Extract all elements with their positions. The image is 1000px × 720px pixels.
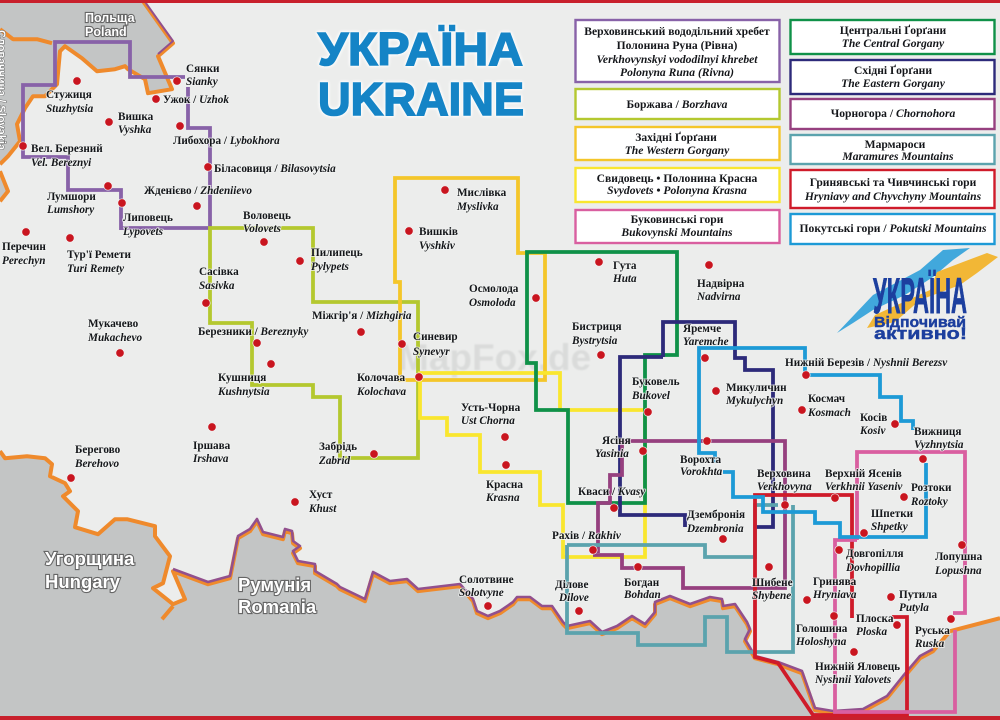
legend: right column: Центральні Ґорґани (840, 23, 947, 37)
settlement labels: Mykulychyn (725, 395, 783, 407)
settlement labels: Holoshyna (795, 636, 847, 648)
settlement labels: Krasna (485, 492, 520, 504)
route: Western Gorgany (395, 178, 545, 380)
settlement labels: Mukachevo (87, 332, 142, 344)
settlement labels: Verkhnii Yaseniv (825, 481, 903, 493)
settlement labels: Либохора / Lybokhora (173, 135, 280, 147)
settlement labels: Бистриця (572, 321, 622, 333)
settlement labels: Vorokhta (680, 466, 723, 478)
route: Borzhava (210, 228, 418, 458)
settlement labels: Вижниця (914, 426, 961, 438)
legend: right column (790, 20, 994, 244)
settlement labels: Тур'ї Ремети (67, 249, 131, 261)
settlement labels: Ворохта (680, 454, 722, 466)
settlement labels: Kushnytsia (217, 386, 270, 398)
settlement labels: Красна (486, 479, 523, 491)
settlement labels: Hryniava (812, 589, 857, 601)
settlement labels: Гута (613, 260, 637, 272)
settlement labels: Volovets (243, 223, 282, 235)
settlement labels: Verkhovyna (757, 481, 812, 493)
settlement labels: Нижній Березів / Nyshnii Berezsv (785, 357, 948, 369)
country labels: Hungary (45, 571, 121, 592)
settlement labels: Lypovets (122, 226, 164, 238)
settlement labels: Солотвине (459, 574, 514, 586)
settlement labels: Колочава (357, 372, 406, 384)
legend: left column: The Western Gorgany (625, 144, 730, 157)
settlement labels: Вишків (419, 226, 458, 238)
settlement labels: Ust Chorna (461, 415, 515, 427)
settlement labels: Воловець (243, 210, 291, 222)
legend: left column: Буковинські гори (631, 213, 724, 226)
settlement labels: Sianky (186, 76, 218, 88)
title (318, 23, 524, 125)
settlement labels: Yasinia (595, 448, 629, 460)
legend: left column: Верховинський вододільний хребет (584, 25, 770, 38)
settlement labels: Kolochava (356, 386, 407, 398)
legend: left column: Західні Ґорґани (635, 130, 717, 144)
settlement labels: Myslivka (456, 201, 499, 213)
settlement labels: Нижній Яловець (815, 661, 900, 673)
settlement labels: Буковель (632, 376, 680, 388)
legend: right column: Maramures Mountains (841, 150, 954, 163)
settlement labels: Путила (899, 589, 938, 601)
settlement labels: Мислівка (457, 187, 507, 199)
settlement labels: Забрідь (319, 441, 357, 453)
settlement labels: Березники / Bereznyky (198, 326, 308, 338)
settlement labels: Ploska (856, 626, 887, 638)
settlement labels: Верхній Ясенів (825, 468, 902, 480)
settlement labels: Ждeнієво / Zhdeniievo (144, 185, 252, 197)
legend: left column: Polonyna Runa (Rivna) (620, 66, 734, 79)
settlement labels: Ужок / Uzhok (163, 94, 229, 106)
settlement labels: Lumshory (46, 204, 94, 216)
settlement labels: Yaremche (683, 336, 729, 348)
settlement labels: Розтоки (911, 482, 952, 494)
settlement labels: Вишка (118, 111, 154, 123)
legend: left column (576, 20, 780, 243)
settlement labels: Vyzhnytsia (914, 439, 964, 451)
settlement labels: Руська (915, 625, 950, 637)
country labels: Romania (238, 596, 317, 617)
settlement labels: Bohdan (623, 589, 661, 601)
settlement labels: Bukovel (631, 390, 671, 402)
settlement labels: Solotvyne (459, 587, 504, 599)
settlement labels: Липовець (123, 212, 173, 224)
settlement labels: Dovhopillia (845, 562, 900, 574)
settlement labels: Шибене (752, 577, 793, 589)
settlement labels: Shpetky (871, 521, 908, 533)
settlement labels: Synevyr (413, 346, 450, 358)
settlement labels: Berehovo (74, 458, 120, 470)
settlement labels: Осмолода (469, 283, 519, 295)
settlement labels: Vyshkiv (419, 240, 456, 252)
legend: right column: Покутські гори / Pokutski Mountains (800, 222, 987, 235)
legend: right column: The Central Gorgany (842, 37, 945, 50)
settlement labels: Putyla (899, 602, 929, 614)
settlement labels: Дзембронія (687, 509, 745, 521)
watermark: MapFox.de (398, 337, 591, 378)
settlement labels: Верховина (757, 468, 811, 480)
title: UKRAINE (318, 73, 524, 125)
settlement labels: Лопушна (935, 551, 983, 563)
settlement labels: Пилипець (311, 247, 363, 259)
settlement labels: Гринява (813, 576, 857, 588)
settlement labels: Dilove (558, 592, 589, 604)
settlement labels: Kosmach (807, 407, 851, 419)
country labels (0, 11, 317, 617)
settlement labels: Vel. Bereznyi (31, 157, 92, 169)
logo: Україна Відпочивай активно (837, 248, 998, 343)
country labels: Польща (85, 11, 136, 25)
settlement labels: Микуличин (726, 382, 787, 394)
legend: right column: Мармароси (865, 138, 926, 151)
settlement labels: Усть-Чорна (461, 402, 521, 414)
legend: right column: Hryniavy and Chyvchyny Mountains (804, 190, 982, 203)
settlement labels: Nyshnii Yalovets (814, 674, 892, 686)
route: Central Gorgany (527, 252, 677, 503)
logo: Україна Відпочивай активно: активно! (874, 324, 967, 343)
settlement labels: Космач (808, 393, 846, 405)
settlement labels: Ясіня (602, 435, 631, 447)
settlement labels: Turi Remety (67, 263, 124, 275)
settlement labels: Богдан (624, 577, 660, 589)
legend: right column: Східні Ґорґани (854, 63, 932, 77)
settlement labels: Кушниця (218, 372, 266, 384)
legend: left column: Verkhovynskyi vododilnyi khrebet (596, 53, 758, 66)
legend: right column: Чорногора / Chornohora (831, 107, 955, 120)
settlement labels: Білaсовиця / Bilasovytsia (214, 163, 336, 175)
settlement labels: Сянки (186, 63, 220, 75)
settlement labels: Перечин (2, 241, 46, 253)
legend: left column: Svydovets • Polonyna Krasna (607, 184, 747, 197)
settlement labels: Довгопілля (846, 548, 904, 560)
logo: Україна Відпочивай активно: Відпочивай (874, 315, 966, 331)
settlement labels: Кваси / Kvasy (578, 486, 645, 498)
settlement labels: Ruska (914, 638, 945, 650)
route: Maramures Mountains (567, 505, 793, 652)
settlement labels: Zabrid (318, 455, 350, 467)
settlement labels: Stuzhytsia (46, 103, 94, 115)
settlement labels: Huta (612, 273, 637, 285)
settlement labels: Roztoky (910, 496, 948, 508)
settlement labels: Bystrytsia (571, 335, 618, 347)
settlement labels: Шпетки (871, 508, 914, 520)
route: Verkhovyna watershed ridge (purple) (23, 42, 210, 230)
settlement labels: Irshava (192, 453, 229, 465)
settlement labels: Іршава (193, 440, 231, 452)
legend: left column: Полонина Руна (Рівна) (617, 39, 737, 52)
settlement labels: Ділове (555, 579, 588, 591)
settlement labels: Надвірна (697, 278, 745, 290)
legend: left column: Боржава / Borzhava (627, 98, 728, 111)
settlement labels: Сасівка (199, 266, 239, 278)
route: Pokutski Mountains (699, 348, 926, 537)
settlement labels: Голошина (796, 623, 848, 635)
route: Hryniavy and Chyvchyny Mountains (755, 495, 907, 715)
settlement labels: Perechyn (2, 255, 46, 267)
legend: right column: The Eastern Gorgany (841, 77, 946, 90)
country labels: Poland (85, 25, 127, 39)
settlements: dots (19, 77, 966, 656)
settlement labels: Синевир (413, 331, 458, 343)
title: УКРАЇНА (318, 23, 523, 75)
country labels: Румунія (238, 574, 311, 595)
settlement labels: Dzembronia (686, 523, 744, 535)
settlement labels: Osmoloda (469, 297, 516, 309)
settlement labels: Shybene (752, 590, 791, 602)
settlement labels: Вел. Березний (31, 143, 103, 155)
settlement labels: Хуст (309, 489, 333, 501)
settlement labels: Лумшори (47, 191, 96, 203)
settlement labels: Vyshka (118, 124, 152, 136)
settlement labels: Берегово (75, 444, 121, 456)
settlement labels: Khust (308, 503, 337, 515)
legend: right column: Гринявські та Чивчинські гори (810, 176, 977, 189)
settlement labels: Плоска (856, 613, 894, 625)
settlement labels: Pylypets (311, 261, 350, 273)
route: Chornohora (593, 441, 785, 588)
route: Svydovets (420, 373, 645, 557)
settlement labels: Lopushna (934, 565, 982, 577)
settlement labels: Мукачево (88, 318, 139, 330)
route: Eastern Gorgany (620, 322, 773, 527)
settlement labels: Рахів / Rakhiv (552, 530, 622, 542)
settlement labels: Стужиця (46, 89, 92, 101)
settlement labels: Sasivka (199, 280, 235, 292)
route: Bukovynski Mountains (835, 452, 965, 712)
settlement labels: Kosiv (859, 425, 887, 437)
settlement labels: Міжгір'я / Mizhgiria (312, 310, 412, 322)
legend: left column: Свидовець • Полонина Красна (597, 172, 758, 185)
settlement labels: Косів (860, 412, 887, 424)
settlement labels: Nadvirna (696, 291, 741, 303)
settlement labels: Яремче (683, 323, 721, 335)
country labels: Угорщина (45, 548, 135, 569)
legend: left column: Bukovynski Mountains (620, 226, 733, 239)
